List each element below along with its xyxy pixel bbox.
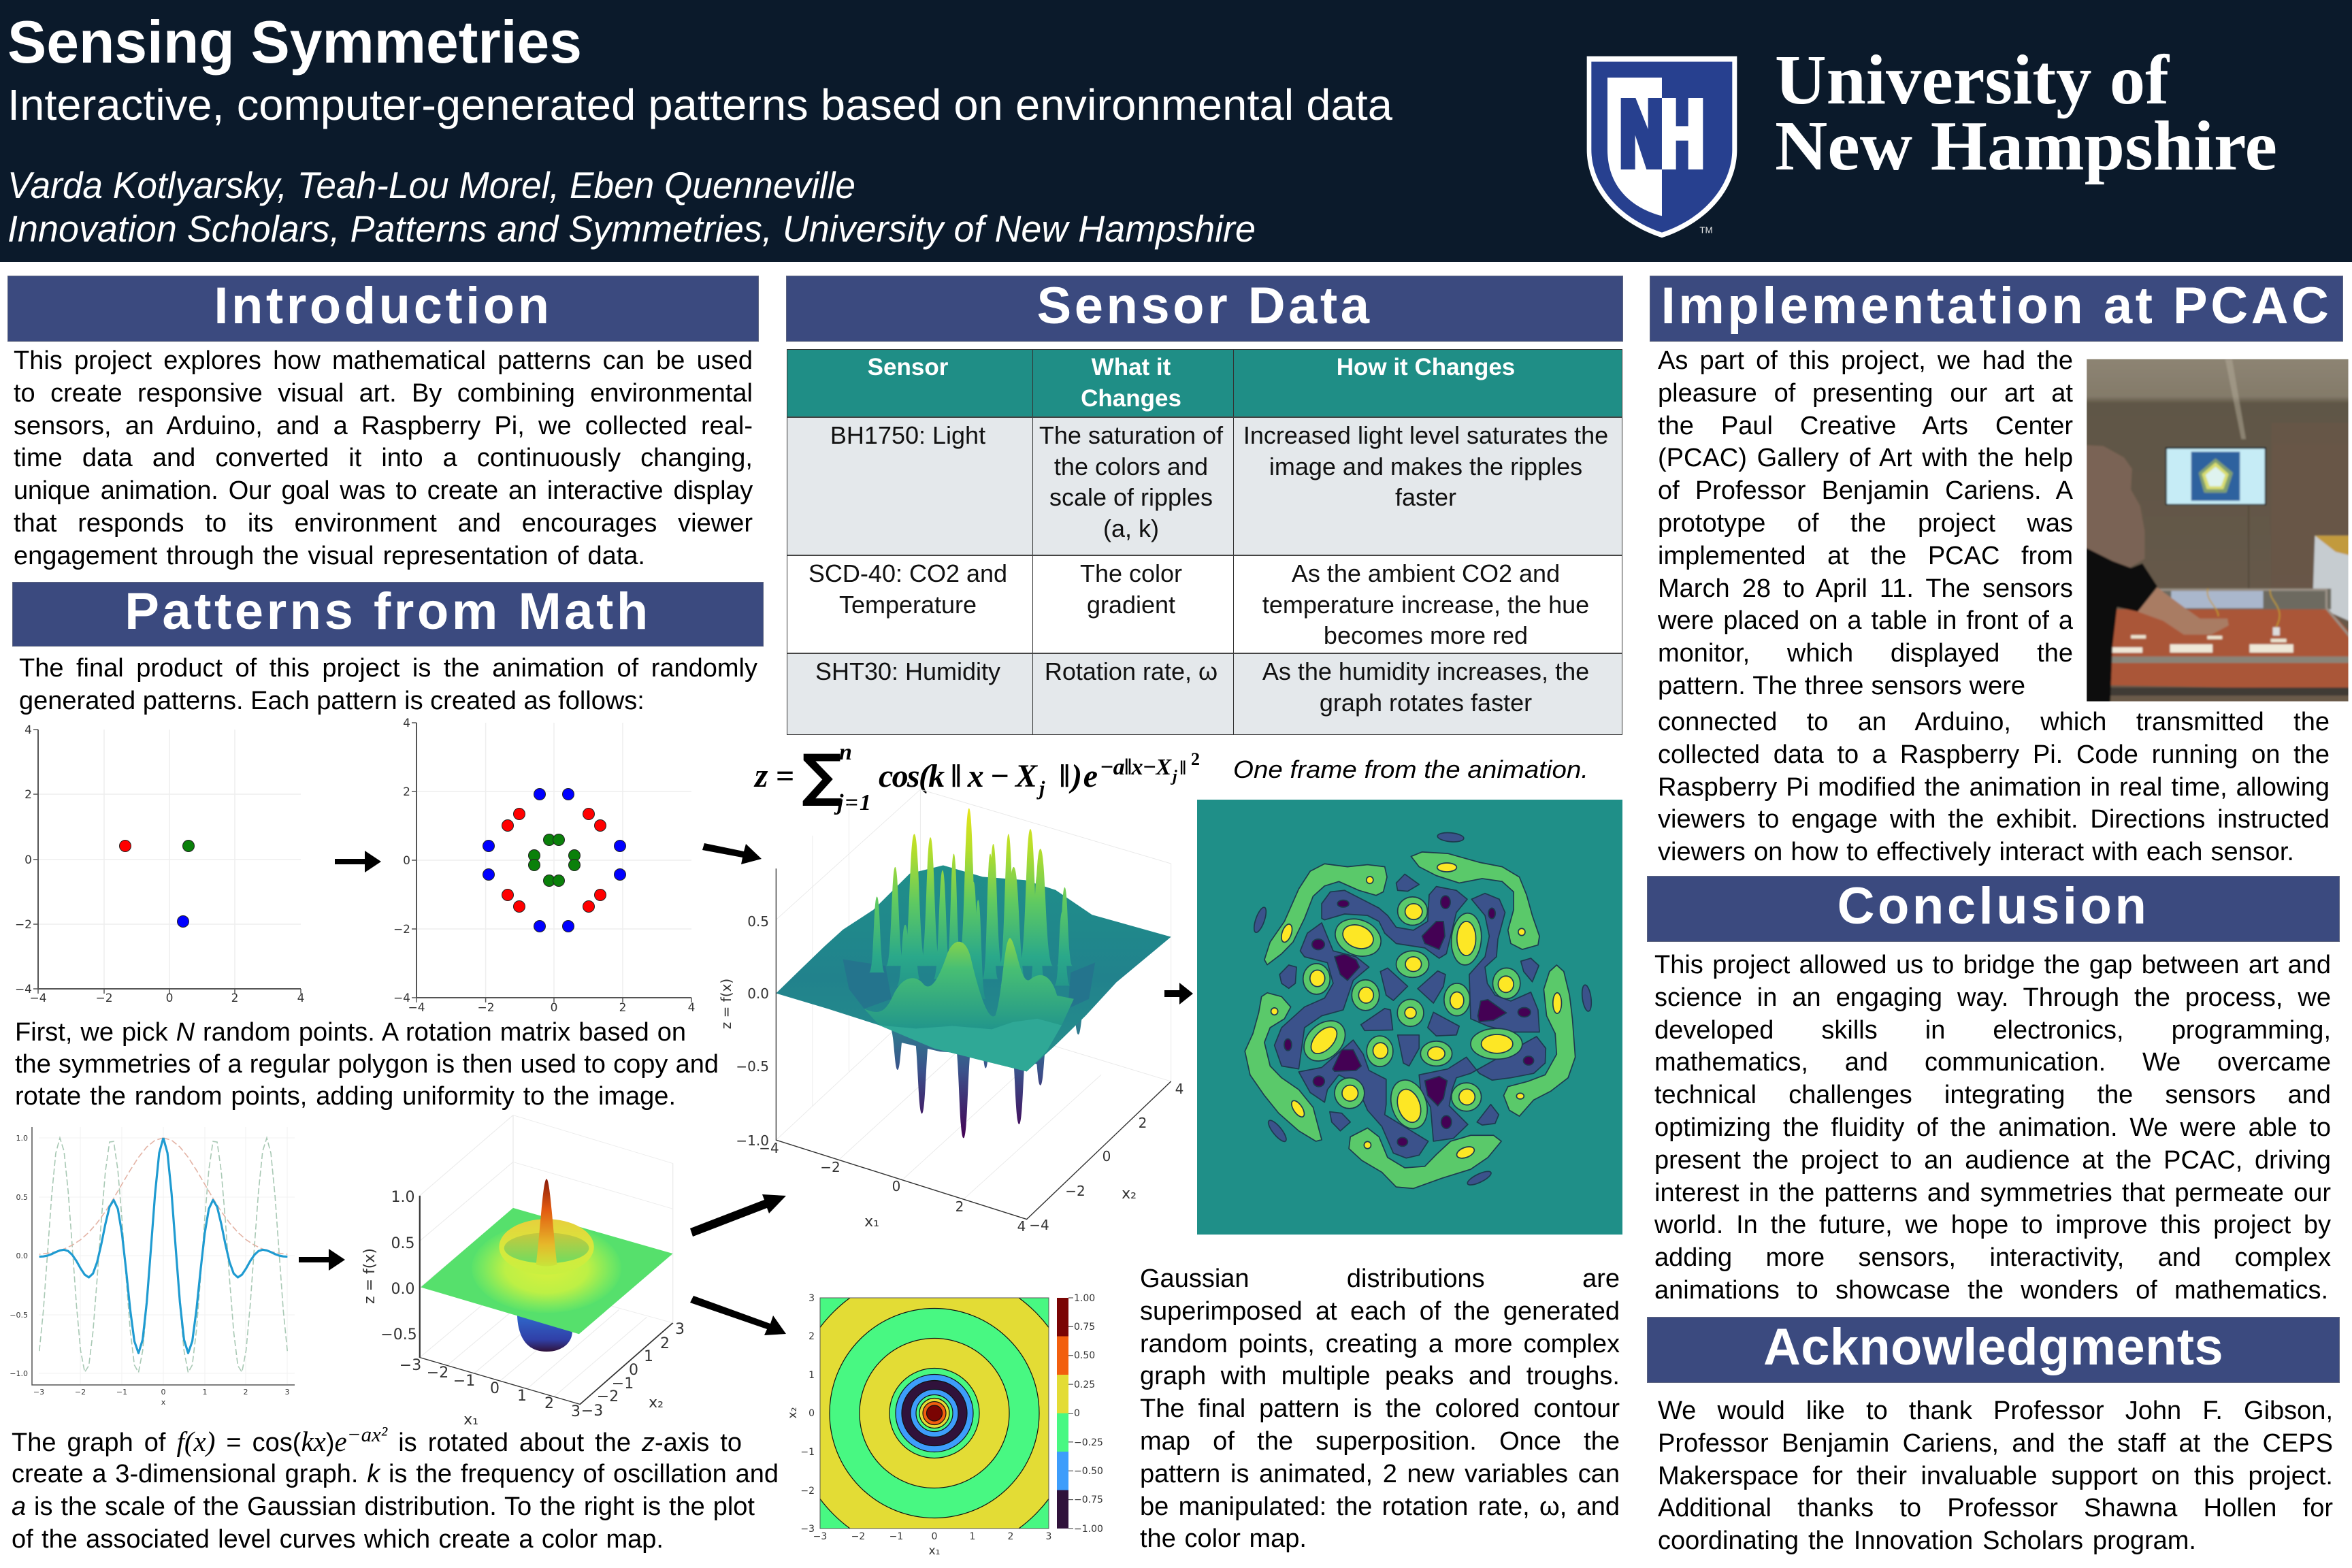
heading: Introduction — [7, 276, 759, 342]
chart: contour color map: 2 — [808, 1331, 815, 1342]
formula: j=1 — [834, 790, 871, 815]
row: BH1750: (a, k) — [1103, 514, 1159, 542]
chart: 1D damped cosine: −1 — [116, 1388, 127, 1396]
text: implementation continued: connected to an Arduino, which transmitted the — [1658, 708, 2330, 736]
chart: rotated points scatter: 0 — [403, 854, 410, 868]
text: gaussian explanation: random points, creating a more complex — [1140, 1330, 1620, 1358]
text: implementation beside photo: pleasure of presenting our art at — [1658, 379, 2073, 408]
row: SCD-40: As the ambient CO2 and — [1292, 559, 1560, 587]
chart: contour color map: 3 — [808, 1293, 815, 1304]
chart: initial random points scatter: 0 — [166, 992, 173, 1005]
text: gaussian explanation: superimposed at each of the generated — [1140, 1297, 1620, 1326]
formula: ‖)e — [1059, 758, 1098, 794]
text: conclusion paragraph: science in an engaging way. Through the process, we — [1654, 983, 2331, 1012]
chart: 1D damped cosine: 3 — [284, 1388, 290, 1396]
table header row — [787, 350, 1622, 418]
chart: 3D rotated surface: 3 — [571, 1403, 581, 1420]
chart: contour color map: 1 — [970, 1531, 975, 1542]
arrow: 1D to 3D — [299, 1249, 345, 1271]
chart: 3D rotated surface: 0 — [490, 1380, 500, 1397]
chart: contour color map: −3 — [813, 1531, 827, 1542]
text: gaussian explanation: The final pattern is the colored contour — [1140, 1394, 1620, 1423]
text: points explanation — [15, 1018, 719, 1111]
text: conclusion paragraph: world. In the future, we hope to improve this project by — [1654, 1211, 2331, 1239]
affiliation: Innovation Scholars, Patterns and Symmetries, University of New Hampshire — [7, 208, 1256, 250]
arrow: points to rotated points — [335, 851, 381, 872]
authors: Varda Kotlyarsky, Teah-Lou Morel, Eben Quenneville — [7, 164, 855, 206]
chart: 1D damped cosine: 0.5 — [16, 1193, 28, 1202]
color bar legend: −1.00 — [1074, 1524, 1103, 1535]
color bar legend: −0.50 — [1074, 1466, 1103, 1477]
formula — [753, 740, 1200, 815]
chart: 3D rotated surface: −2 — [427, 1365, 448, 1382]
chart: rotated points scatter — [393, 717, 695, 1015]
chart: contour color map: −3 — [800, 1524, 815, 1535]
text: acknowledgments paragraph: Additional thanks to Professor Shawna Hollen for — [1658, 1494, 2333, 1522]
chart: 1D damped cosine: −2 — [75, 1388, 86, 1396]
university wordmark: New Hampshire — [1775, 107, 2277, 185]
table header row: Sensor — [868, 354, 948, 380]
university wordmark: University of — [1775, 41, 2170, 119]
row: SCD-40: Temperature — [839, 591, 977, 619]
image: animation frame pattern — [1197, 800, 1622, 1235]
heading: Sensor Data — [786, 276, 1623, 342]
text: implementation beside photo: As part of this project, we had the — [1658, 346, 2073, 375]
chart: initial random points scatter: −4 — [29, 992, 47, 1005]
heading: Sensor Data: Sensor Data — [1037, 276, 1372, 335]
row: BH1750: The saturation of — [1039, 421, 1223, 449]
text: conclusion paragraph: adding more sensors, interactivity, and complex — [1654, 1243, 2331, 1272]
text: implementation beside photo: (PCAC) Gallery of Art with the help — [1658, 444, 2073, 472]
chart: superposition 3D surface: −4 — [1029, 1217, 1049, 1233]
chart: 3D rotated surface: −2 — [597, 1388, 619, 1405]
formula: = — [776, 758, 794, 794]
text: introduction paragraph: unique animation. Our goal was to create an interactive display — [14, 476, 753, 505]
chart: initial random points scatter: −2 — [15, 918, 32, 932]
chart: contour color map: 0 — [932, 1531, 937, 1542]
text: implementation continued — [1658, 708, 2330, 866]
chart: contour color map: −1 — [889, 1531, 903, 1542]
chart: superposition 3D surface: 4 — [1017, 1218, 1026, 1235]
heading: Conclusion — [1647, 876, 2340, 942]
heading: Implementation at PCAC: Implementation at PCAC — [1661, 276, 2332, 335]
text: implementation beside photo: March 28 to April 11. The sensors — [1658, 574, 2073, 603]
chart: initial random points scatter: −2 — [95, 992, 113, 1005]
chart: superposition 3D surface: −2 — [1065, 1183, 1085, 1199]
chart: 3D rotated surface: 2 — [660, 1335, 670, 1352]
color bar legend: −0.75 — [1074, 1494, 1103, 1505]
text: patterns intro — [19, 654, 757, 715]
chart: superposition 3D surface: x₁ — [864, 1213, 879, 1230]
chart: superposition 3D surface — [718, 789, 1183, 1235]
text: implementation beside photo: implemented at the PCAC from — [1658, 542, 2073, 570]
heading: Acknowledgments — [1647, 1317, 2340, 1383]
chart: 3D rotated surface: x₁ — [463, 1411, 478, 1428]
text: introduction paragraph: engagement through the visual representation of data. — [14, 542, 645, 570]
poster title: Sensing Symmetries — [7, 8, 582, 76]
chart: 3D rotated surface: 0 — [629, 1362, 638, 1379]
formula: j — [1036, 777, 1045, 800]
row: SCD-40: temperature increase, the hue — [1262, 591, 1589, 619]
text: gaussian explanation — [1140, 1264, 1620, 1553]
text: implementation beside photo: were placed on a table in front of a — [1658, 606, 2073, 635]
text: introduction paragraph: that responds to its environment and encourages viewer — [14, 509, 753, 538]
icon: UNH shield logo — [1587, 56, 1737, 238]
chart: rotated points scatter: 2 — [619, 1001, 626, 1015]
chart: contour color map: 1 — [808, 1370, 815, 1381]
chart: superposition 3D surface: 4 — [1175, 1081, 1183, 1097]
arrow: rotated points to superposition — [702, 843, 762, 864]
university wordmark — [1775, 41, 2277, 185]
chart: superposition 3D surface: −1.0 — [736, 1132, 769, 1149]
text: implementation beside photo — [1658, 346, 2073, 700]
row: SCD-40: gradient — [1087, 591, 1175, 619]
text: patterns intro: generated patterns. Each pattern is created as follows: — [19, 687, 644, 715]
text: gaussian explanation: the color map. — [1140, 1524, 1307, 1553]
text: implementation beside photo: prototype of the project was — [1658, 509, 2073, 538]
icon: UNH shield logo: TM — [1699, 225, 1713, 235]
formula: cos(k ‖ x − X — [879, 758, 1038, 794]
chart: 3D rotated surface: 0.0 — [391, 1281, 415, 1298]
chart: rotated points scatter: 4 — [688, 1001, 695, 1015]
text: conclusion paragraph: developed skills in electronics, programming, — [1654, 1016, 2331, 1045]
text: introduction paragraph: time data and converted it into a continuously changing, — [14, 444, 753, 472]
formula: z — [753, 756, 768, 794]
row: SHT30 — [787, 654, 1622, 734]
text: rotation explanation: The graph of f(x) = cos(kx)e−ax² is rotated about the z-axis to — [12, 1422, 742, 1457]
chart: 3D rotated surface: 1.0 — [391, 1189, 415, 1206]
chart: 1D damped cosine: 2 — [244, 1388, 248, 1396]
chart: 3D rotated surface: 3 — [675, 1321, 685, 1338]
chart: contour color map: 3 — [1046, 1531, 1051, 1542]
chart: initial random points scatter: −4 — [15, 983, 32, 996]
text: acknowledgments paragraph: Professor Benjamin Cariens, and the staff at the CEPS — [1658, 1429, 2333, 1458]
chart: 1D damped cosine: −1.0 — [10, 1369, 28, 1378]
chart: 1D damped cosine: x — [161, 1398, 166, 1407]
text: conclusion paragraph: animations to showcase the wonders of mathematics. — [1654, 1276, 2328, 1305]
heading: Conclusion: Conclusion — [1838, 877, 2149, 935]
arrow: surface to frame — [1164, 983, 1193, 1004]
chart: superposition 3D surface: 0.0 — [747, 985, 769, 1002]
color bar legend: 0 — [1074, 1408, 1080, 1419]
text: implementation continued: collected data to a Raspberry Pi. Code running on the — [1658, 740, 2330, 769]
table header row: What it — [1092, 354, 1171, 380]
text: implementation continued: Raspberry Pi modified the animation in real time, allowing — [1658, 773, 2330, 802]
row: BH1750: image and makes the ripples — [1269, 453, 1582, 480]
text: acknowledgments paragraph: We would like to thank Professor John F. Gibson, — [1658, 1396, 2333, 1425]
text: points explanation: rotate the random points, adding uniformity to the image. — [15, 1082, 676, 1111]
chart: contour color map: −2 — [800, 1486, 815, 1497]
chart: initial random points scatter: 4 — [297, 992, 304, 1005]
row: BH1750 — [787, 418, 1622, 556]
formula: −a‖x−X — [1100, 755, 1172, 780]
text: points explanation: First, we pick N random points. A rotation matrix based on — [15, 1018, 686, 1047]
chart: superposition 3D surface: −0.5 — [736, 1058, 769, 1075]
color bar legend: 1.00 — [1074, 1293, 1095, 1304]
chart: 3D rotated surface: −0.5 — [380, 1326, 417, 1343]
chart: 3D rotated surface: −3 — [581, 1403, 603, 1420]
formula: n — [839, 740, 852, 765]
chart: 1D damped cosine: −0.5 — [10, 1311, 28, 1320]
text: acknowledgments paragraph: Makerspace for their invaluable support on this project. — [1658, 1462, 2333, 1490]
chart: rotated points scatter: −4 — [408, 1001, 425, 1015]
chart: 1D damped cosine: 0.0 — [16, 1252, 28, 1260]
chart: rotated points scatter: 2 — [403, 785, 410, 799]
row: BH1750: scale of ripples — [1049, 483, 1213, 511]
color bar legend: −0.25 — [1074, 1437, 1103, 1448]
text: implementation beside photo: monitor, which displayed the — [1658, 639, 2073, 668]
chart: superposition 3D surface: z = f(x) — [718, 979, 734, 1029]
chart: 1D damped cosine: 1 — [203, 1388, 207, 1396]
subtitle: Interactive, computer-generated patterns based on environmental data — [7, 80, 1392, 129]
row: SCD-40: The color — [1080, 559, 1182, 587]
formula: 2 — [1191, 749, 1200, 769]
text: introduction paragraph: This project explores how mathematical patterns can be used — [14, 346, 753, 375]
chart: contour color map: 0 — [808, 1408, 815, 1419]
text: conclusion paragraph — [1654, 951, 2331, 1305]
arrow: 3D to contour plot — [690, 1296, 786, 1335]
caption: one frame: One frame from the animation. — [1233, 755, 1588, 783]
header banner — [0, 0, 2352, 262]
chart: initial random points scatter: 4 — [24, 723, 32, 737]
text: acknowledgments paragraph — [1658, 1396, 2333, 1555]
text: gaussian explanation: graph with multiple peaks and troughs. — [1140, 1362, 1620, 1390]
formula: j — [1170, 768, 1177, 785]
formula: ∑ — [802, 742, 843, 808]
color bar legend: 0.75 — [1074, 1322, 1095, 1333]
chart: initial random points scatter: 2 — [231, 992, 238, 1005]
chart: superposition 3D surface: x₂ — [1122, 1186, 1137, 1203]
row: BH1750: faster — [1395, 483, 1456, 511]
row: SHT30: As the humidity increases, the — [1262, 657, 1589, 685]
text: implementation beside photo: the Paul Creative Arts Center — [1658, 412, 2073, 440]
arrow: 3D to superposition — [690, 1194, 786, 1237]
chart: superposition 3D surface: 0.5 — [747, 913, 769, 930]
row: SCD-40: SCD-40: CO2 and — [808, 559, 1007, 587]
image: photo of exhibit at PCAC — [2080, 354, 2352, 706]
chart: rotated points scatter: −4 — [393, 992, 410, 1005]
row: SHT30: Rotation rate, ω — [1045, 657, 1218, 685]
text: introduction paragraph: sensors, an Arduino, and a Raspberry Pi, we collected real- — [14, 412, 753, 440]
text: introduction paragraph — [14, 346, 753, 570]
chart: 3D rotated surface: 0.5 — [391, 1235, 415, 1252]
chart: 1D damped cosine: 0 — [161, 1388, 166, 1396]
color bar legend: 0.50 — [1074, 1350, 1095, 1361]
text: rotation explanation: create a 3-dimensional graph. k is the frequency of oscillation and — [12, 1460, 779, 1488]
chart: contour color map — [789, 1294, 1102, 1554]
chart: superposition 3D surface: −4 — [759, 1140, 779, 1156]
row: BH1750: BH1750: Light — [830, 421, 985, 449]
chart: 1D damped cosine: 1.0 — [16, 1134, 28, 1143]
chart: superposition 3D surface: 0 — [892, 1178, 900, 1194]
chart: initial random points scatter: 2 — [24, 788, 32, 802]
chart: contour color map: −2 — [851, 1531, 865, 1542]
chart: 3D rotated surface: −3 — [399, 1357, 421, 1374]
chart: 1D damped cosine — [10, 1127, 295, 1407]
chart: contour color map: x₂ — [786, 1407, 800, 1418]
color bar legend: 0.25 — [1074, 1379, 1095, 1390]
chart: superposition 3D surface: 2 — [956, 1198, 964, 1215]
row: SHT30: graph rotates faster — [1320, 689, 1532, 717]
chart: rotated points scatter: −2 — [393, 923, 410, 936]
text: conclusion paragraph: mathematics, and communication. We overcame — [1654, 1048, 2331, 1077]
chart: rotated points scatter: 4 — [403, 717, 410, 730]
chart: superposition 3D surface: 0 — [1102, 1148, 1111, 1164]
text: points explanation: the symmetries of a regular polygon is then used to copy and — [15, 1050, 719, 1079]
chart: rotated points scatter: −2 — [477, 1001, 495, 1015]
chart: 3D rotated surface: 1 — [517, 1388, 527, 1405]
chart: contour color map: 2 — [1008, 1531, 1013, 1542]
text: conclusion paragraph: optimizing the fluidity of the animation. We were able to — [1654, 1113, 2331, 1142]
table header row: How it Changes — [1337, 354, 1515, 380]
chart: 3D rotated surface: 1 — [644, 1348, 653, 1365]
text: rotation explanation: of the associated level curves which create a color map. — [12, 1525, 664, 1554]
chart: contour color map: x₁ — [929, 1544, 940, 1558]
text: conclusion paragraph: present the project to an audience at the PCAC, driving — [1654, 1146, 2331, 1175]
row: SCD-40 — [787, 556, 1622, 654]
heading: Patterns from Math: Patterns from Math — [125, 583, 651, 640]
text: gaussian explanation: map of the superposition. Once the — [1140, 1427, 1620, 1456]
text: rotation explanation: a is the scale of the Gaussian distribution. To the right is the plot — [12, 1492, 755, 1521]
row: SCD-40: becomes more red — [1324, 621, 1528, 649]
text: gaussian explanation: Gaussian distributions are — [1140, 1264, 1620, 1293]
table: sensor data — [787, 349, 1622, 735]
heading: Patterns from Math — [12, 582, 764, 647]
heading: Introduction: Introduction — [214, 276, 553, 335]
chart: initial random points scatter — [15, 723, 304, 1005]
text: implementation beside photo: pattern. The three sensors were — [1658, 672, 2025, 700]
text: conclusion paragraph: interest in the patterns and symmetries that permeate our — [1654, 1179, 2331, 1207]
table header row: Changes — [1081, 385, 1181, 412]
text: acknowledgments paragraph: coordinating the Innovation Scholars program. — [1658, 1526, 2196, 1555]
text: conclusion paragraph: This project allowed us to bridge the gap between art and — [1654, 951, 2331, 979]
color bar legend — [1057, 1293, 1103, 1535]
row: BH1750: Increased light level saturates the — [1243, 421, 1608, 449]
text: implementation continued: viewers to engage with the exhibit. Directions instructed — [1658, 805, 2330, 834]
text: gaussian explanation: pattern is animated, 2 new variables can — [1140, 1460, 1620, 1488]
row: BH1750: the colors and — [1054, 453, 1208, 480]
row: SHT30: SHT30: Humidity — [815, 657, 1000, 685]
chart: rotated points scatter: 0 — [551, 1001, 557, 1015]
chart: 3D rotated surface — [361, 1115, 685, 1428]
text: implementation continued: viewers on how to effectively interact with each sensor. — [1658, 838, 2294, 866]
heading: Acknowledgments: Acknowledgments — [1763, 1318, 2223, 1376]
text: implementation beside photo: of Professor Benjamin Cariens. A — [1658, 476, 2073, 505]
text: conclusion paragraph: technical challenges integrating the sensors and — [1654, 1081, 2331, 1109]
chart: superposition 3D surface: −2 — [820, 1159, 840, 1175]
chart: 3D rotated surface: −1 — [453, 1373, 475, 1390]
chart: 3D rotated surface: z = f(x) — [361, 1248, 378, 1304]
chart: initial random points scatter: 0 — [24, 853, 32, 867]
formula: ‖ — [1179, 757, 1186, 779]
text: rotation explanation — [12, 1422, 779, 1554]
chart: 3D rotated surface: −1 — [612, 1375, 634, 1392]
chart: superposition 3D surface: 2 — [1139, 1115, 1147, 1131]
chart: 1D damped cosine: −3 — [33, 1388, 44, 1396]
chart: 3D rotated surface: 2 — [544, 1395, 554, 1412]
chart: contour color map: −1 — [800, 1447, 815, 1458]
chart: 3D rotated surface: x₂ — [649, 1394, 664, 1411]
text: gaussian explanation: be manipulated: the rotation rate, ω, and — [1140, 1492, 1620, 1521]
text: patterns intro: The final product of this project is the animation of randomly — [19, 654, 757, 683]
text: introduction paragraph: to create responsive visual art. By combining environmental — [14, 379, 753, 408]
